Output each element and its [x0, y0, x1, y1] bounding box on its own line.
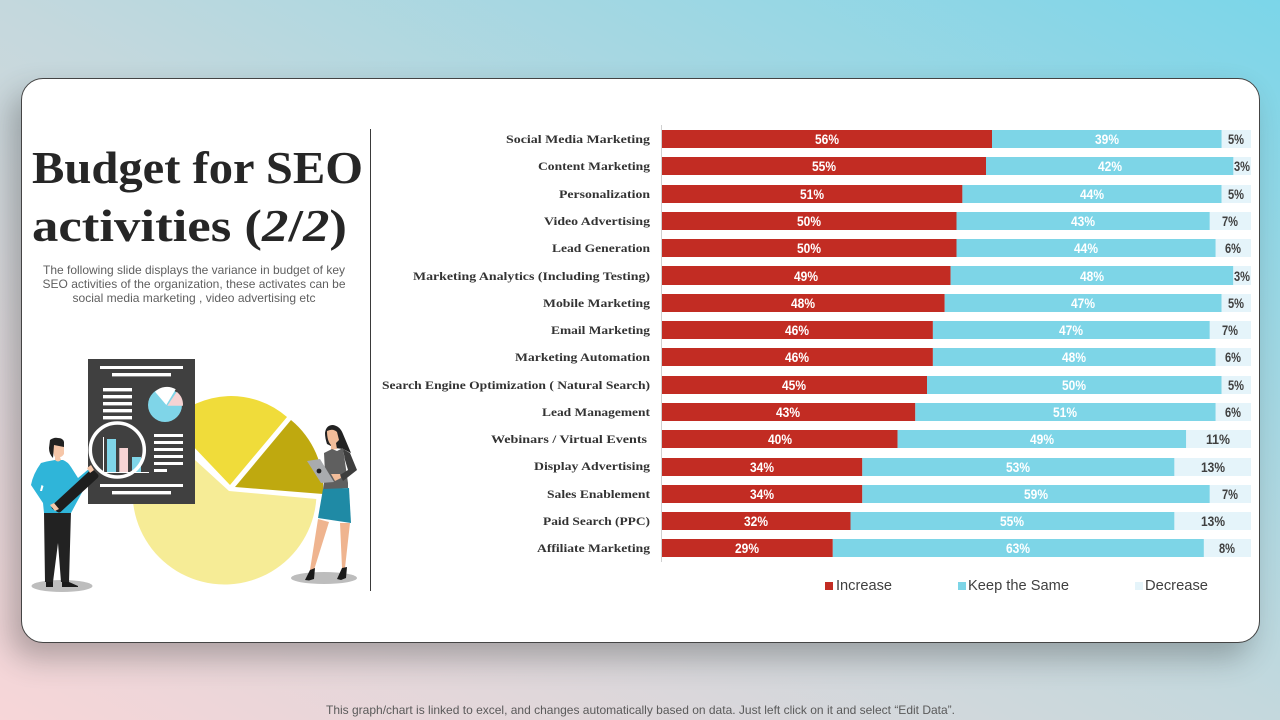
row: Sales Enablement — [547, 485, 1251, 503]
row: Lead Management — [542, 403, 1251, 421]
row: Display Advertising: 34% — [750, 459, 774, 475]
pie chart — [133, 396, 323, 584]
footer note: This graph/chart is linked to excel, and changes automatically based on data. Just left click on it and select “Edit Data”. — [326, 703, 955, 717]
row: Marketing Analytics: 48% — [1080, 268, 1104, 284]
row: Email Marketing: 47% — [1059, 322, 1083, 338]
row: Sales Enablement: Sales Enablement — [547, 487, 650, 501]
row: Sales Enablement: 59% — [1024, 486, 1048, 502]
row: Search Engine Optimization: 45% — [782, 377, 806, 393]
row: Webinars / Virtual Events: 49% — [1030, 431, 1054, 447]
row: Search Engine Optimization: 50% — [1062, 377, 1086, 393]
row: Paid Search (PPC): 13% — [1201, 513, 1225, 529]
row: Affiliate Marketing: 29% — [735, 540, 759, 556]
row: Social Media Marketing: 56% — [815, 131, 839, 147]
row: Content Marketing: 3% — [1234, 158, 1250, 174]
legend: Increase — [836, 578, 892, 594]
row: Social Media Marketing: Social Media Marketing — [506, 132, 650, 146]
panel: white card — [21, 78, 1260, 643]
row: Marketing Analytics: 3% — [1234, 268, 1250, 284]
description text: social media marketing , video advertising etc — [72, 291, 316, 305]
description text — [42, 263, 346, 305]
row: Mobile Marketing: 48% — [791, 295, 815, 311]
row: Marketing Automation: 6% — [1225, 349, 1241, 365]
row: Email Marketing: 7% — [1222, 322, 1238, 338]
row: Video Advertising: 43% — [1071, 213, 1095, 229]
row: Webinars / Virtual Events: 11% — [1206, 431, 1230, 447]
row: Lead Generation: 50% — [797, 240, 821, 256]
stacked bar chart — [382, 125, 1251, 562]
row: Mobile Marketing — [543, 294, 1251, 312]
row: Search Engine Optimization: Search Engine Optimization ( Natural Search) — [382, 378, 650, 392]
description text: SEO activities of the organization, these activates can be — [42, 277, 346, 291]
row: Email Marketing: Email Marketing — [551, 323, 650, 337]
row: Lead Management: 43% — [776, 404, 800, 420]
row: Personalization: Personalization — [559, 187, 650, 201]
row: Affiliate Marketing: 63% — [1006, 540, 1030, 556]
row: Email Marketing — [551, 321, 1251, 339]
row: Lead Generation: 44% — [1074, 240, 1098, 256]
row: Content Marketing: Content Marketing — [538, 159, 650, 173]
row: Display Advertising: Display Advertising — [534, 459, 650, 473]
row: Search Engine Optimization: 5% — [1228, 377, 1244, 393]
row: Paid Search (PPC): Paid Search (PPC) — [543, 514, 650, 528]
row: Social Media Marketing: 5% — [1228, 131, 1244, 147]
row: Webinars / Virtual Events — [491, 430, 1251, 448]
description text: The following slide displays the variance in budget of key — [43, 263, 345, 277]
row: Paid Search (PPC): 32% — [744, 513, 768, 529]
row: Marketing Analytics: 49% — [794, 268, 818, 284]
row: Paid Search (PPC): 55% — [1000, 513, 1024, 529]
title: Budget for SEO — [32, 142, 363, 193]
legend: Keep the Same — [968, 578, 1069, 594]
row: Marketing Automation — [515, 348, 1251, 366]
row: Marketing Automation: 48% — [1062, 349, 1086, 365]
row: Lead Management: 51% — [1053, 404, 1077, 420]
row: Video Advertising: Video Advertising — [544, 214, 650, 228]
row: Affiliate Marketing: Affiliate Marketing — [537, 541, 650, 555]
row: Sales Enablement: 7% — [1222, 486, 1238, 502]
row: Mobile Marketing: Mobile Marketing — [543, 296, 650, 310]
title: activities ( 2/2) — [32, 200, 347, 251]
row: Affiliate Marketing — [537, 539, 1251, 557]
row: Mobile Marketing: 47% — [1071, 295, 1095, 311]
row: Personalization: 5% — [1228, 186, 1244, 202]
row: Paid Search (PPC) — [543, 512, 1251, 530]
woman with tablet — [291, 425, 357, 584]
row: Content Marketing — [538, 157, 1251, 175]
row: Content Marketing: 42% — [1098, 158, 1122, 174]
row: Social Media Marketing — [506, 130, 1251, 148]
row: Lead Generation: 6% — [1225, 240, 1241, 256]
row: Personalization — [559, 185, 1251, 203]
row: Video Advertising: 50% — [797, 213, 821, 229]
row: Lead Management: 6% — [1225, 404, 1241, 420]
row: Email Marketing: 46% — [785, 322, 809, 338]
row: Video Advertising: 7% — [1222, 213, 1238, 229]
legend — [825, 578, 1208, 594]
row: Video Advertising — [544, 212, 1251, 230]
row: Personalization: 51% — [800, 186, 824, 202]
title — [32, 142, 363, 251]
row: Lead Generation: Lead Generation — [552, 241, 650, 255]
row: Display Advertising: 53% — [1006, 459, 1030, 475]
row: Content Marketing: 55% — [812, 158, 836, 174]
legend: Decrease — [1145, 578, 1208, 594]
report document — [88, 359, 195, 504]
row: Lead Generation — [552, 239, 1251, 257]
man with magnifier — [31, 438, 96, 592]
row: Marketing Automation: Marketing Automation — [515, 350, 650, 364]
row: Personalization: 44% — [1080, 186, 1104, 202]
row: Marketing Analytics: Marketing Analytics (Including Testing) — [413, 269, 650, 283]
illustration: analytics people with pie chart — [31, 359, 357, 592]
row: Webinars / Virtual Events: Webinars / Virtual Events — [491, 432, 647, 446]
row: Affiliate Marketing: 8% — [1219, 540, 1235, 556]
row: Marketing Analytics — [413, 266, 1251, 285]
row: Display Advertising: 13% — [1201, 459, 1225, 475]
row: Sales Enablement: 34% — [750, 486, 774, 502]
row: Social Media Marketing: 39% — [1095, 131, 1119, 147]
row: Marketing Automation: 46% — [785, 349, 809, 365]
row: Display Advertising — [534, 458, 1251, 476]
row: Lead Management: Lead Management — [542, 405, 650, 419]
row: Search Engine Optimization — [382, 376, 1251, 394]
row: Mobile Marketing: 5% — [1228, 295, 1244, 311]
row: Webinars / Virtual Events: 40% — [768, 431, 792, 447]
